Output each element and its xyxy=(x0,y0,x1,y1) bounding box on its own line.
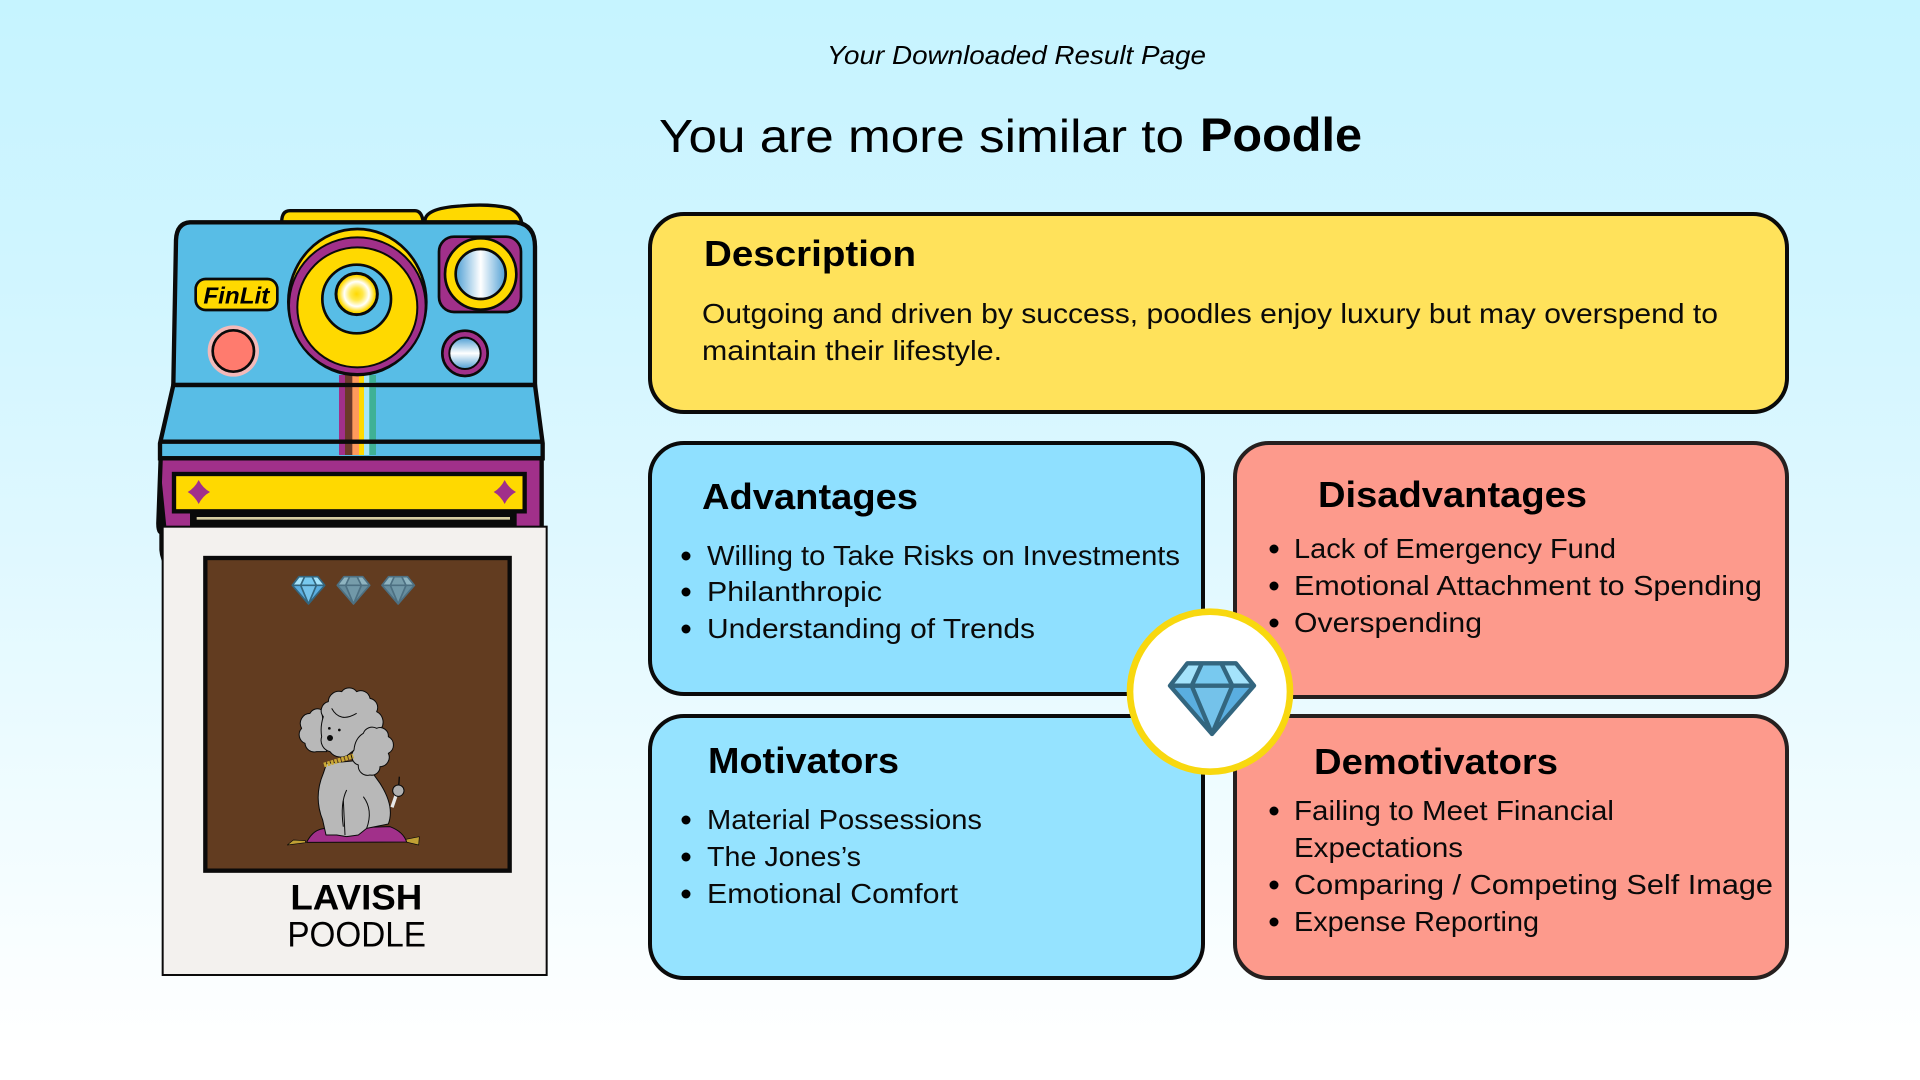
tray sparkles xyxy=(188,480,516,504)
icon: diamond xyxy=(1170,663,1254,734)
panel: advantages xyxy=(650,443,1203,694)
rainbow stripe xyxy=(160,375,543,455)
card paper xyxy=(163,527,547,975)
title: you are more similar to poodle xyxy=(659,108,1362,162)
center badge: diamond xyxy=(1130,612,1290,772)
camera base xyxy=(158,458,542,532)
small sensor xyxy=(442,331,488,376)
face xyxy=(327,708,357,741)
panel: disadvantages xyxy=(1235,443,1787,697)
disadvantages list: Lack of Emergency Fund xyxy=(1294,533,1616,564)
advantages list: Philanthropic xyxy=(707,576,882,607)
heading: demotivators: Demotivators xyxy=(1314,741,1558,782)
heading: description: Description xyxy=(704,233,916,274)
motivators list: The Jones’s xyxy=(707,841,861,872)
demotivators list: Comparing / Competing Self Image xyxy=(1294,869,1773,900)
demotivators list xyxy=(1270,795,1773,937)
title: you are more similar to poodle: You are more similar to xyxy=(659,110,1184,162)
viewfinder xyxy=(439,237,521,312)
film slot xyxy=(190,511,517,529)
poodle illustration xyxy=(287,688,419,845)
disadvantages list: Overspending xyxy=(1294,607,1482,638)
demotivators list: Expectations xyxy=(1294,832,1463,863)
title: you are more similar to poodle: Poodle xyxy=(1200,108,1362,161)
demotivators list: Failing to Meet Financial xyxy=(1294,795,1614,826)
finlit badge: FinLit xyxy=(203,282,271,308)
advantages list xyxy=(682,540,1180,644)
tail xyxy=(392,777,404,807)
card name: POODLE xyxy=(287,916,426,955)
panel: motivators xyxy=(650,716,1203,978)
motivators list xyxy=(682,804,982,909)
motivators list: Material Possessions xyxy=(707,804,982,835)
illustration: instant camera xyxy=(158,205,543,570)
disadvantages list xyxy=(1270,533,1762,638)
leg lines xyxy=(342,790,369,835)
description text xyxy=(702,298,1718,366)
panel: description xyxy=(650,214,1787,412)
advantages list: Understanding of Trends xyxy=(707,613,1035,644)
panel: demotivators xyxy=(1235,716,1787,978)
heading: motivators: Motivators xyxy=(708,740,899,781)
heading: disadvantages: Disadvantages xyxy=(1318,474,1587,515)
cushion xyxy=(287,827,419,845)
left ear xyxy=(299,709,327,752)
description text: Outgoing and driven by success, poodles enjoy luxury but may overspend to xyxy=(702,298,1718,329)
polaroid card: lavish poodle xyxy=(163,527,547,975)
film tray xyxy=(174,474,525,511)
red shutter button xyxy=(208,325,259,377)
card name xyxy=(287,878,426,955)
demotivators list: Expense Reporting xyxy=(1294,906,1539,937)
eyebrow: your downloaded result page: Your Downloaded Result Page xyxy=(827,40,1206,70)
body xyxy=(318,760,390,837)
right ear xyxy=(352,727,393,775)
advantages list: Willing to Take Risks on Investments xyxy=(707,540,1180,571)
rating diamonds xyxy=(292,577,414,604)
camera top buttons xyxy=(282,205,522,222)
camera upper body xyxy=(173,222,535,385)
photo background xyxy=(205,558,510,871)
disadvantages list: Emotional Attachment to Spending xyxy=(1294,570,1762,601)
left bottom outline xyxy=(159,457,167,570)
gold collar xyxy=(324,756,353,765)
camera lower body xyxy=(160,385,543,458)
heading: advantages: Advantages xyxy=(702,476,918,517)
card name: LAVISH xyxy=(290,878,422,917)
head xyxy=(321,688,383,757)
finlit badge xyxy=(196,279,277,310)
motivators list: Emotional Comfort xyxy=(707,878,958,909)
description text: maintain their lifestyle. xyxy=(702,335,1002,366)
main lens xyxy=(288,229,426,375)
